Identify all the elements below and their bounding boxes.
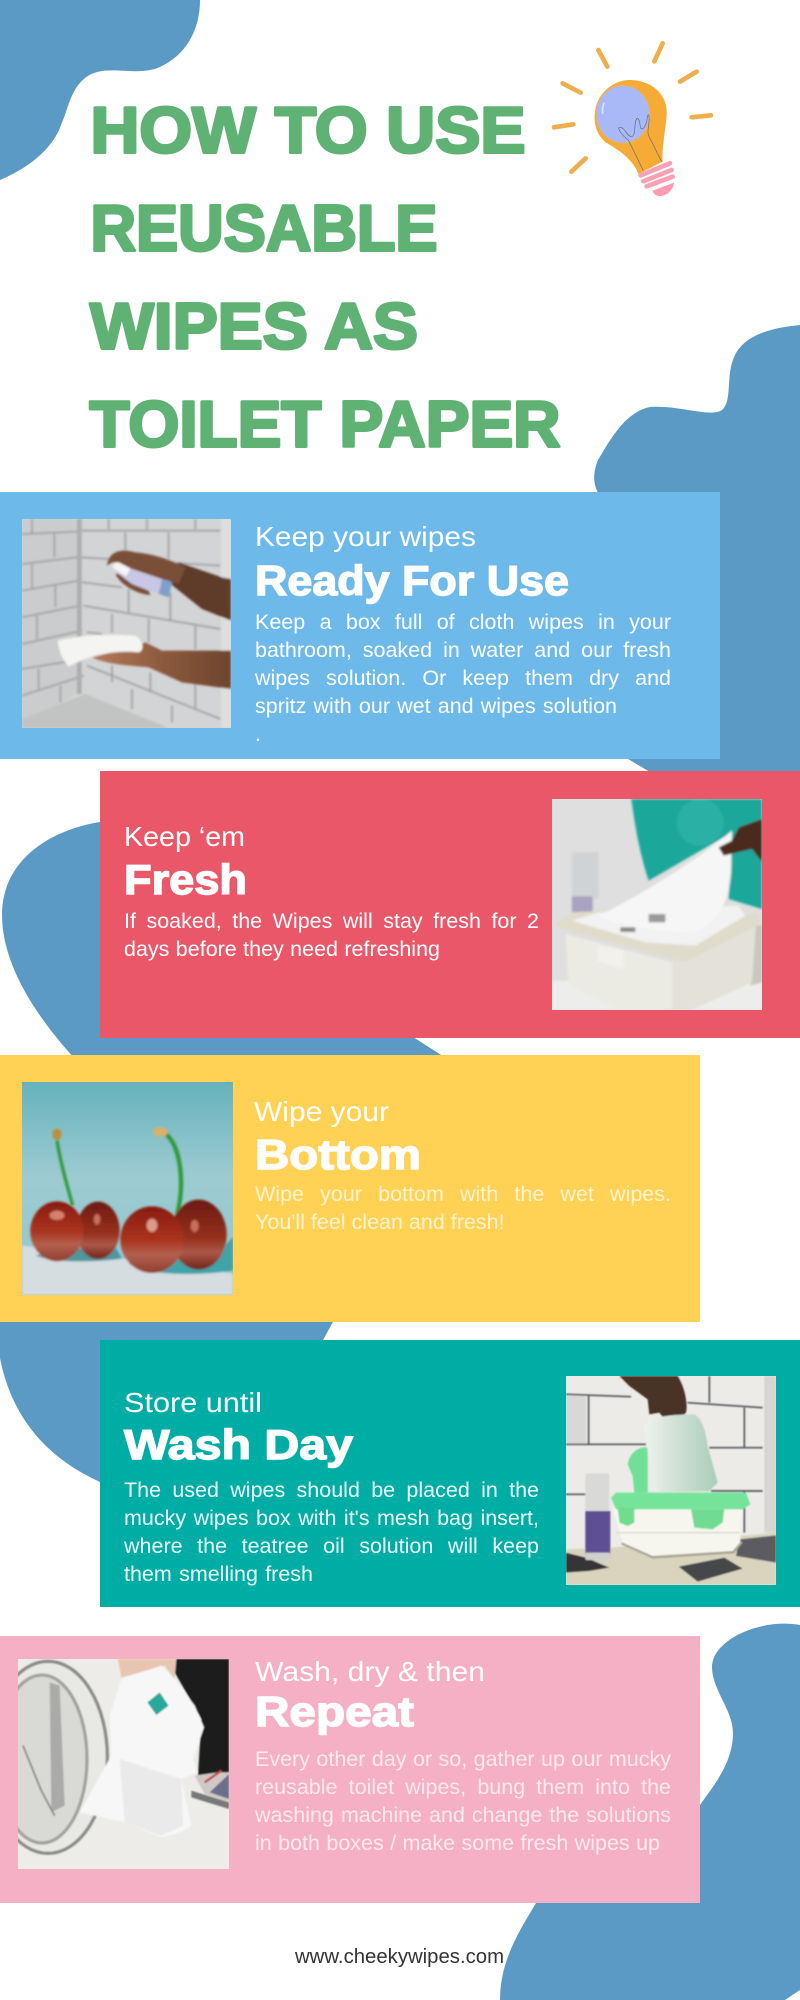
- text: wipe your bottom body: [255, 1182, 671, 1234]
- panel: store until wash day: [100, 1340, 800, 1607]
- heading: Store until: [124, 1387, 262, 1418]
- text: repeat body: washing machine and change the solutions: [255, 1803, 671, 1827]
- photo: wipe lifted from box: [552, 799, 762, 1010]
- text: ready for use body: bathroom, soaked in water and our fresh: [255, 638, 671, 662]
- text: wash day body: them smelling fresh: [124, 1562, 313, 1586]
- heading: Keep ‘em: [124, 821, 245, 852]
- heading: [255, 1656, 485, 1736]
- photo: mesh bag and wipes box: [566, 1376, 776, 1585]
- heading: [124, 821, 247, 903]
- heading: Ready For Use: [255, 557, 569, 604]
- text: repeat body: reusable toilet wipes, bung them into the: [255, 1775, 671, 1799]
- panel: wash dry repeat: [0, 1636, 700, 1903]
- panel: ready for use: [0, 492, 720, 759]
- photo: hands spraying a wipe: [22, 519, 231, 728]
- text: ready for use body: spritz with our wet and wipes solution: [255, 694, 617, 718]
- photo: two cherries: [22, 1082, 233, 1295]
- text: wash day body: The used wipes should be placed in the: [124, 1478, 539, 1502]
- text: wipe your bottom body: You'll feel clean and fresh!: [255, 1210, 505, 1234]
- heading: [123, 1387, 354, 1468]
- heading: Repeat: [255, 1688, 414, 1735]
- text: keep fresh body: days before they need refreshing: [124, 937, 440, 961]
- text: wipe your bottom body: Wipe your bottom with the wet wipes.: [255, 1182, 671, 1206]
- text: wash day body: [124, 1478, 539, 1586]
- text: ready for use body: .: [255, 722, 261, 746]
- text: repeat body: in both boxes / make some fresh wipes up: [255, 1831, 660, 1855]
- title: REUSABLE: [90, 192, 438, 264]
- heading: Wipe your: [254, 1096, 389, 1127]
- text: ready for use body: [255, 610, 671, 746]
- title: [88, 94, 561, 460]
- photo: washing machine and mesh bag: [18, 1659, 229, 1869]
- title: TOILET PAPER: [90, 388, 560, 460]
- icon: light bulb: [552, 41, 714, 196]
- heading: Keep your wipes: [255, 521, 476, 552]
- text: wash day body: where the teatree oil solution will keep: [124, 1534, 539, 1558]
- heading: Wash Day: [124, 1421, 354, 1468]
- text: ready for use body: wipes solution. Or keep them dry and: [255, 666, 671, 690]
- text: keep fresh body: If soaked, the Wipes will stay fresh for 2: [124, 909, 539, 933]
- heading: Wash, dry & then: [255, 1656, 485, 1687]
- title: WIPES AS: [90, 290, 418, 362]
- website link text: www.cheekywipes.com: [294, 1946, 504, 1968]
- heading: Fresh: [124, 856, 247, 903]
- text: wash day body: mucky wipes box with it's mesh bag insert,: [124, 1506, 539, 1530]
- heading: [254, 1096, 421, 1178]
- text: repeat body: [255, 1747, 671, 1855]
- heading: Bottom: [255, 1131, 421, 1178]
- text: ready for use body: Keep a box full of cloth wipes in your: [255, 610, 671, 634]
- panel: wipe your bottom: [0, 1055, 700, 1322]
- title: HOW TO USE: [90, 94, 526, 166]
- text: keep fresh body: [124, 909, 539, 961]
- text: repeat body: Every other day or so, gather up our mucky: [255, 1747, 671, 1771]
- heading: [255, 521, 569, 604]
- panel: keep fresh: [100, 771, 800, 1038]
